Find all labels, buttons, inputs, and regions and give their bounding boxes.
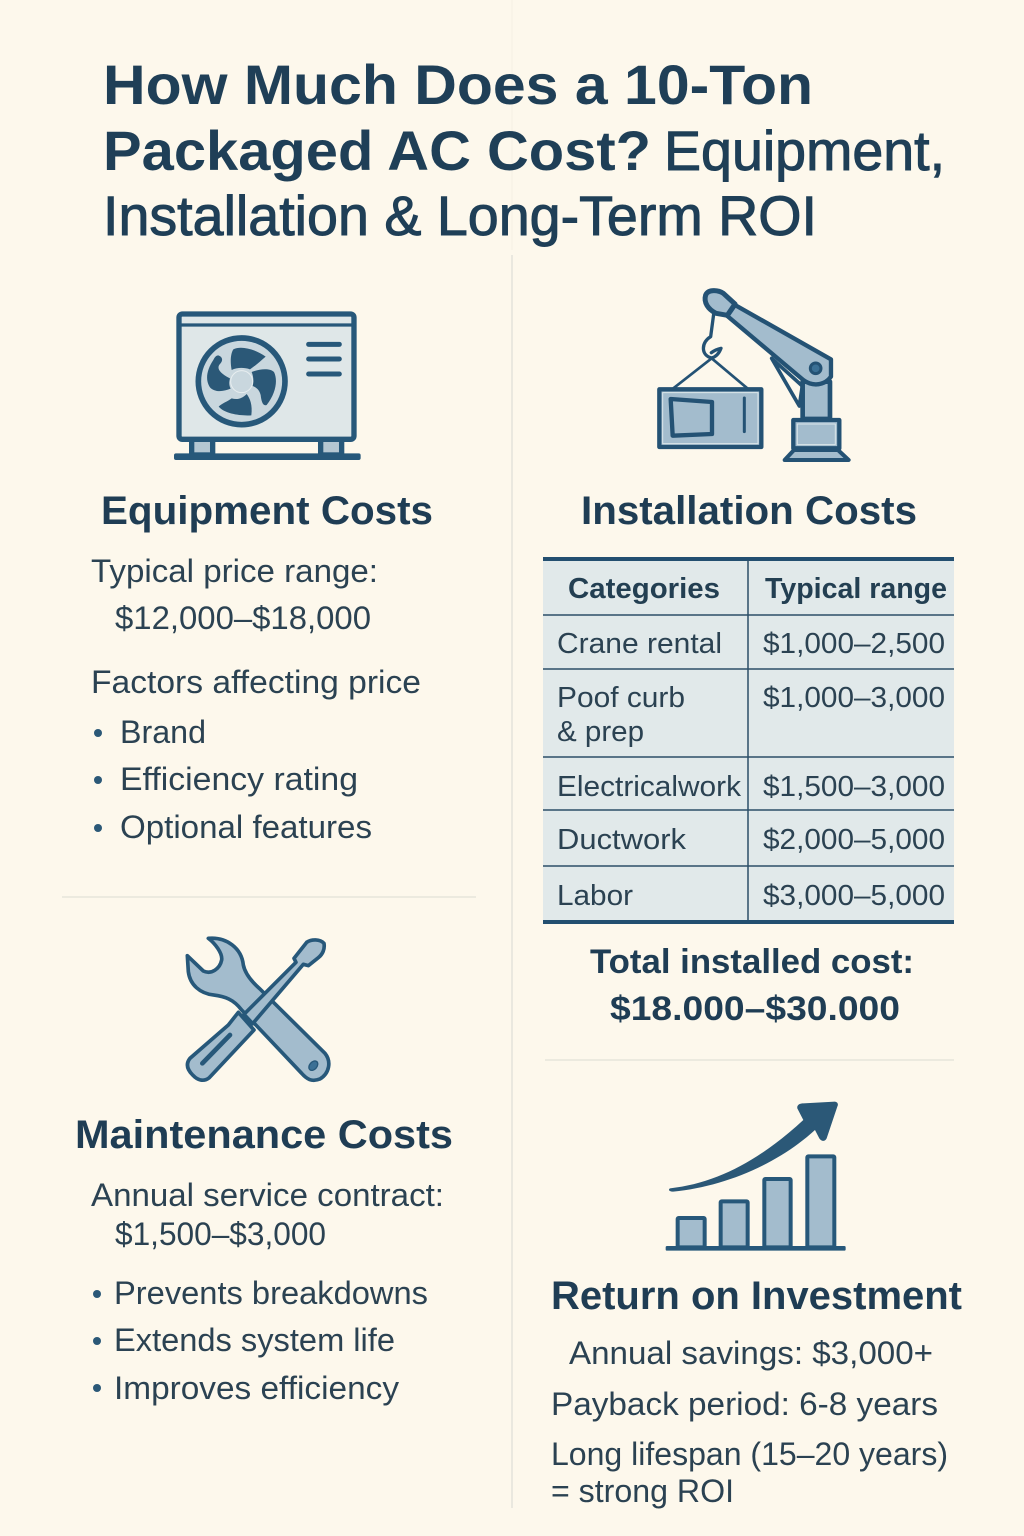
icon: wrench and screwdriver <box>187 938 329 1080</box>
list: maintenance benefits: Improves efficiency <box>114 1370 399 1406</box>
icon: rising bar chart with arrow <box>666 1102 846 1251</box>
heading: maintenance costs: Maintenance Costs <box>75 1113 453 1157</box>
table: installation cost ranges: $3,000–5,000 <box>763 880 945 912</box>
list: maintenance benefits: Extends system life <box>114 1322 395 1358</box>
title: Equipment, <box>664 119 945 182</box>
text: typical price range <box>91 553 378 636</box>
title <box>103 53 945 247</box>
callout: total installed cost <box>590 943 914 1028</box>
table: installation cost ranges <box>543 557 954 924</box>
table: installation cost ranges: Typical range <box>765 573 947 605</box>
text: typical price range: Typical price range: <box>91 553 378 589</box>
list: maintenance benefits: Prevents breakdowns <box>114 1275 428 1311</box>
panel: installation costs <box>543 291 954 1028</box>
text: long lifespan: Long lifespan (15–20 years) <box>551 1436 948 1472</box>
table: installation cost ranges: $1,500–3,000 <box>763 771 945 803</box>
text: factors affecting price: Factors affecting price <box>91 664 421 700</box>
table: installation cost ranges: Poof curb <box>557 682 685 714</box>
panel: return on investment <box>551 1102 962 1509</box>
text: factors affecting price: Efficiency rating <box>120 761 358 797</box>
icon: packaged AC unit <box>174 314 361 460</box>
table: installation cost ranges: Electricalwork <box>557 771 742 803</box>
list: maintenance benefits <box>93 1275 428 1406</box>
title: Packaged AC Cost? <box>103 119 651 182</box>
panel: maintenance costs <box>75 938 453 1406</box>
table: installation cost ranges: Crane rental <box>557 628 722 660</box>
text: annual service contract: Annual service contract: <box>91 1177 444 1213</box>
callout: total installed cost: Total installed cost: <box>590 943 914 981</box>
callout: total installed cost: $18.000–$30.000 <box>610 990 900 1028</box>
text: long lifespan <box>551 1436 948 1509</box>
table: installation cost ranges: $1,000–3,000 <box>763 682 945 714</box>
text: payback period: Payback period: 6-8 years <box>551 1386 938 1422</box>
table: installation cost ranges: Labor <box>557 880 633 912</box>
heading: equipment costs: Equipment Costs <box>101 489 433 533</box>
heading: return on investment: Return on Investment <box>551 1274 962 1318</box>
table: installation cost ranges: Ductwork <box>557 824 687 856</box>
text: long lifespan: = strong ROI <box>551 1473 734 1509</box>
text: annual service contract: $1,500–$3,000 <box>115 1216 326 1252</box>
heading: installation costs: Installation Costs <box>581 489 917 533</box>
text: factors affecting price: Optional features <box>120 809 372 845</box>
table: installation cost ranges: $2,000–5,000 <box>763 824 945 856</box>
text: annual savings: Annual savings: $3,000+ <box>569 1335 933 1371</box>
title: Installation & Long-Term ROI <box>103 184 817 247</box>
title: How Much Does a 10-Ton <box>103 53 813 116</box>
panel: equipment costs <box>91 314 433 845</box>
text: typical price range: $12,000–$18,000 <box>115 600 371 636</box>
table: installation cost ranges: $1,000–2,500 <box>763 628 945 660</box>
text: factors affecting price <box>91 664 421 845</box>
table: installation cost ranges: & prep <box>557 716 644 748</box>
table: installation cost ranges: Categories <box>568 573 720 605</box>
icon: crane lifting unit <box>659 291 849 460</box>
text: factors affecting price: Brand <box>120 714 206 750</box>
text: annual service contract <box>91 1177 444 1252</box>
